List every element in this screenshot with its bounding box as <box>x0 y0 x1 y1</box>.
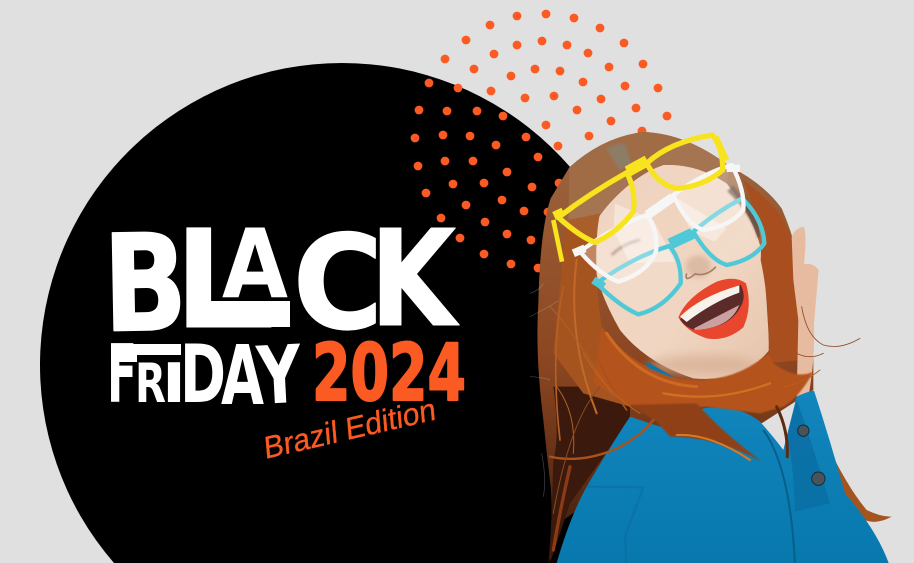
orange dot pattern <box>411 10 671 272</box>
heading: FRIDAY: F <box>107 328 137 421</box>
black circle <box>40 63 644 563</box>
glasses: cyan <box>593 198 764 314</box>
face <box>593 165 769 379</box>
hand <box>792 227 819 397</box>
wispy hair strands on black <box>530 283 560 497</box>
face shading: nose, neck, eyes <box>612 188 762 375</box>
heading: BLACK <box>102 197 460 363</box>
subheading: Brazil Edition: Brazil Edition <box>263 391 437 466</box>
lens reflections <box>613 195 727 263</box>
mouth <box>678 279 749 339</box>
stray hair strands at right <box>783 307 860 387</box>
heading: BLACK: B <box>102 205 188 363</box>
glasses: white <box>573 165 744 282</box>
heading: BLACK: L <box>176 197 276 358</box>
heading: BLACK: K <box>370 203 460 357</box>
shirt buttons <box>798 425 825 485</box>
heading: FRIDAY: D <box>180 328 226 421</box>
photo: woman with three pairs of glasses <box>530 132 892 563</box>
right hair strands <box>743 180 813 363</box>
heading: FRIDAY <box>107 328 304 424</box>
heading: FRIDAY: R <box>135 352 166 415</box>
heading: FRIDAY: Y <box>254 328 304 423</box>
heading: FRIDAY: A <box>221 329 264 424</box>
heading: BLACK: C <box>293 207 383 359</box>
lower hair sweep <box>593 327 813 413</box>
left hair over face <box>553 213 670 407</box>
heading: BLACK: A <box>222 210 288 320</box>
shirt <box>557 362 889 563</box>
heading: FRIDAY: I <box>162 352 186 415</box>
back hair <box>537 132 892 563</box>
glasses: yellow <box>553 135 727 262</box>
hair over forehead <box>568 132 730 227</box>
heading: 2024: 2024 <box>312 329 466 419</box>
hair lock over shoulder <box>630 403 762 462</box>
hair parting <box>606 144 632 170</box>
hair strands <box>550 260 787 550</box>
